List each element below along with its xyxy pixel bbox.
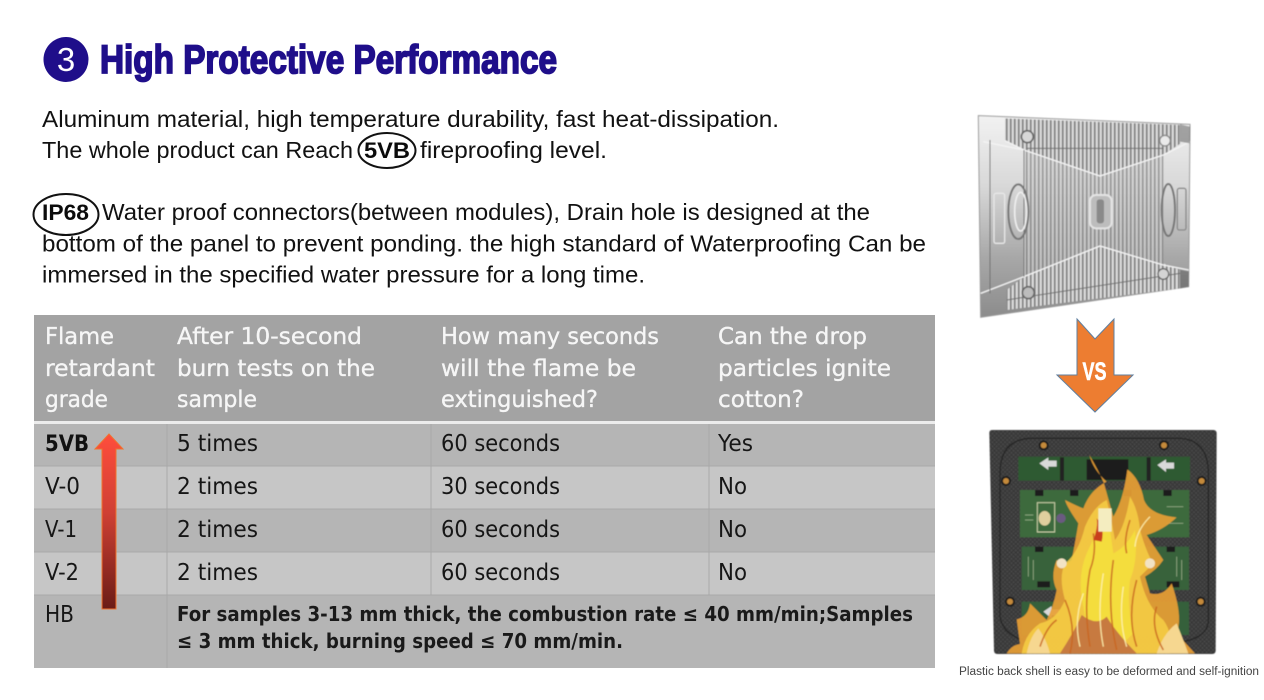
- table header: Can the drop: [718, 324, 867, 350]
- callout: IP68: IP68: [42, 200, 89, 225]
- table header: grade: [45, 387, 108, 413]
- flames: [1007, 455, 1195, 653]
- row: V-0: 30 seconds: [441, 474, 560, 500]
- row: V-2: No: [718, 560, 747, 586]
- table header: cotton?: [718, 387, 804, 413]
- circuit boards: [1018, 457, 1190, 481]
- icon: number 3 badge: 3: [57, 41, 75, 78]
- text block: aluminum and 5VB: [42, 106, 779, 168]
- row: V-1: V-1: [45, 517, 77, 543]
- table header: Flame: [45, 324, 114, 350]
- arrow: orange VS: [1057, 319, 1133, 412]
- text block: IP68 waterproofing: bottom of the panel to prevent ponding. the high standard of Waterproofing Can be: [42, 230, 926, 256]
- row: V-1: No: [718, 517, 747, 543]
- plastic back shell: [989, 430, 1217, 654]
- text block: IP68 waterproofing: [34, 194, 926, 288]
- row: V-0: V-0: [45, 474, 80, 500]
- row: 5VB: 5 times: [177, 431, 258, 457]
- row: 5VB: 60 seconds: [441, 431, 560, 457]
- table header: will the flame be: [441, 356, 636, 382]
- row: V-0: No: [718, 474, 747, 500]
- callout: 5VB: 5VB: [364, 138, 410, 163]
- row: V-0: [34, 466, 935, 509]
- callout: 5VB: [358, 133, 416, 168]
- table header: extinguished?: [441, 387, 598, 413]
- row: V-2: 2 times: [177, 560, 258, 586]
- row: 5VB: 5VB: [45, 432, 89, 457]
- row: V-2: [34, 552, 935, 595]
- icon: number 3 badge: [44, 37, 88, 82]
- text block: IP68 waterproofing: immersed in the specified water pressure for a long time.: [42, 262, 645, 288]
- row: V-2: 60 seconds: [441, 560, 560, 586]
- image: plastic panel on fire: [989, 430, 1217, 654]
- table header: burn tests on the: [177, 356, 375, 382]
- arrow: orange VS: VS: [1082, 358, 1106, 386]
- row: V-2: V-2: [45, 560, 79, 586]
- row: 5VB: [34, 424, 935, 466]
- heading text: High Protective Performance: [100, 38, 557, 82]
- row: V-0: 2 times: [177, 474, 258, 500]
- arrow: rising flame grade: [95, 434, 123, 609]
- row: V-1: 2 times: [177, 517, 258, 543]
- caption: Plastic back shell is easy to be deformed and self-ignition: [959, 666, 1259, 678]
- callout: IP68: [34, 194, 98, 235]
- row: 5VB: Yes: [717, 431, 753, 457]
- row: HB: [34, 595, 935, 668]
- row: HB: HB: [45, 602, 74, 628]
- table header: [34, 315, 935, 421]
- text block: IP68 waterproofing: Water proof connectors(between modules), Drain hole is designed at the: [102, 199, 870, 225]
- title: [44, 37, 557, 82]
- image: aluminum panel back: [978, 116, 1190, 317]
- text block: aluminum and 5VB: fireproofing level.: [420, 137, 607, 163]
- table: flame retardant grades: [34, 315, 935, 668]
- row: HB: For samples 3-13 mm thick, the combustion rate ≤ 40 mm/min;Samples: [177, 602, 913, 626]
- table header: retardant: [45, 356, 155, 382]
- text block: aluminum and 5VB: The whole product can Reach: [42, 137, 353, 163]
- table header: How many seconds: [441, 324, 659, 350]
- row: V-1: [34, 509, 935, 552]
- table header: sample: [177, 387, 257, 413]
- text block: aluminum and 5VB: Aluminum material, high temperature durability, fast heat-dissipation.: [42, 106, 779, 132]
- table header: particles ignite: [718, 356, 891, 382]
- row: HB: ≤ 3 mm thick, burning speed ≤ 70 mm/min.: [177, 629, 623, 653]
- table header: After 10-second: [177, 324, 362, 350]
- screws: [1002, 441, 1206, 606]
- row: V-1: 60 seconds: [441, 517, 560, 543]
